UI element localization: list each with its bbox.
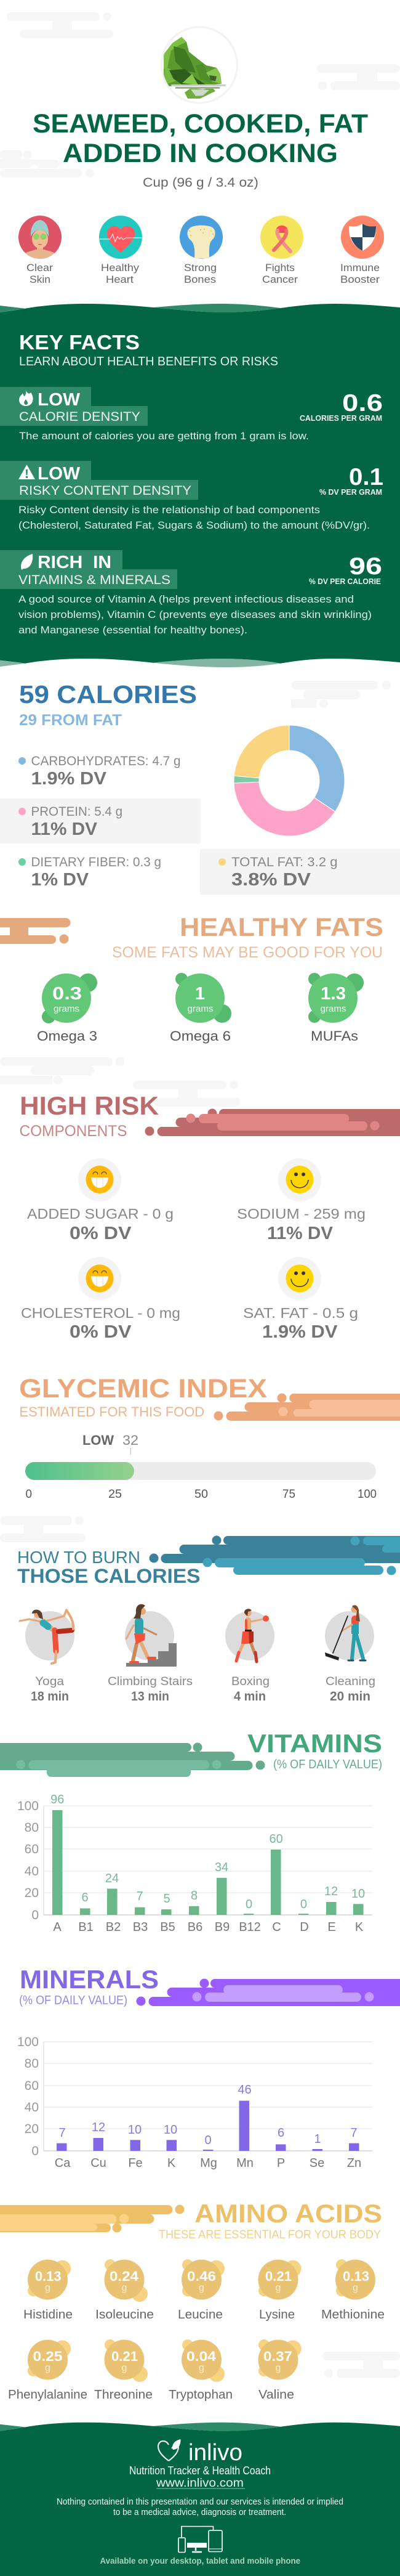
- macro: protein: [18, 805, 122, 839]
- amino acids heading: THESE ARE ESSENTIAL FOR YOUR BODY: [159, 2228, 381, 2241]
- fact: low risky content density: Risky Content density is the relationship of bad components: [18, 505, 320, 516]
- bar chart: vitamins: B5: [160, 1920, 175, 1934]
- amino: histidine: g: [45, 2283, 50, 2293]
- macro: total fat: [218, 855, 337, 890]
- bar chart: minerals: Zn: [347, 2156, 361, 2170]
- icon: leaf: [21, 554, 33, 570]
- MUFAs: 1.3: [321, 984, 346, 1004]
- component: added sugar: ADDED SUGAR - 0 g: [27, 1206, 174, 1222]
- amino acids heading: AMINO ACIDS: [194, 2199, 382, 2228]
- icon: yoga figure: [20, 1609, 73, 1664]
- gauge: glycemic index bar: [25, 1432, 377, 1501]
- amino: threonine: 0.21: [111, 2349, 138, 2364]
- bar chart: minerals: 7: [58, 2126, 66, 2140]
- exercise: boxing: 4 min: [234, 1689, 266, 1704]
- title: SEAWEED, COOKED, FAT: [33, 109, 368, 139]
- bar chart: vitamins: 0: [246, 1898, 252, 1911]
- bar chart: vitamins: 100: [17, 1799, 39, 1813]
- component: cholesterol: 0% DV: [70, 1322, 132, 1342]
- amino: phenylalanine: g: [45, 2363, 50, 2373]
- bar chart: minerals: 10: [128, 2123, 142, 2137]
- macro: carbohydrates: 1.9% DV: [31, 769, 107, 789]
- amino: tryptophan: g: [199, 2363, 204, 2373]
- icon: fights cancer ribbon: [260, 216, 303, 259]
- omega 3: grams: [54, 1004, 79, 1014]
- amino: isoleucine: Isoleucine: [95, 2308, 154, 2322]
- fact: low calorie density: [0, 387, 383, 442]
- fact: low calorie density: CALORIE DENSITY: [19, 410, 140, 424]
- amino: phenylalanine: 0.25: [33, 2349, 63, 2364]
- donut chart: macronutrients: [234, 725, 345, 836]
- bar chart: vitamins: 20: [25, 1886, 39, 1900]
- fact: rich in vitamins and minerals: vision problems), Vitamin C (prevents eye diseases and skin wrinkling): [18, 609, 372, 620]
- icon: devices: [178, 2526, 222, 2552]
- vitamins heading: [247, 1729, 382, 1771]
- exercise: climbing stairs: 13 min: [131, 1689, 169, 1704]
- gauge: glycemic index bar: LOW: [82, 1432, 114, 1448]
- logo: inlivo: inlivo: [188, 2440, 242, 2466]
- component: saturated fat: [243, 1257, 358, 1342]
- amino: tryptophan: 0.04: [186, 2349, 217, 2364]
- benefit labels: Skin: [30, 274, 50, 285]
- glycemic index heading: ESTIMATED FOR THIS FOOD: [20, 1404, 204, 1420]
- component: cholesterol: [21, 1257, 180, 1342]
- amino: threonine: g: [122, 2363, 127, 2373]
- bar chart: vitamins: 24: [105, 1872, 119, 1885]
- amino: threonine: [94, 2339, 153, 2402]
- icon: flame: [19, 390, 33, 406]
- benefit labels: [26, 262, 380, 285]
- component: saturated fat: 1.9% DV: [262, 1322, 338, 1342]
- bar chart: minerals: P: [277, 2156, 285, 2170]
- bar chart: minerals: 0: [204, 2134, 212, 2147]
- fact: rich in vitamins and minerals: VITAMINS & MINERALS: [18, 573, 170, 587]
- bar chart: vitamins: D: [300, 1920, 309, 1934]
- fact: low risky content density: [0, 461, 383, 531]
- bar chart: vitamins: K: [355, 1920, 364, 1934]
- disclaimer: to be a medical advice, diagnosis or treatment.: [113, 2507, 286, 2517]
- exercise: boxing: Boxing: [231, 1675, 270, 1688]
- bar chart: minerals: 80: [25, 2057, 39, 2071]
- serving size: Cup (96 g / 3.4 oz): [143, 176, 258, 190]
- bar chart: vitamins: B3: [133, 1920, 148, 1934]
- bar chart: minerals: 40: [25, 2100, 39, 2115]
- key facts heading: LEARN ABOUT HEALTH BENEFITS OR RISKS: [19, 355, 278, 368]
- bar chart: vitamins: 10: [351, 1887, 365, 1901]
- availability note: Available on your desktop, tablet and mobile phone: [100, 2556, 300, 2566]
- bar chart: vitamins: C: [272, 1920, 281, 1934]
- amino: isoleucine: 0.24: [110, 2269, 139, 2284]
- bar chart: minerals: Mg: [200, 2156, 217, 2170]
- footer tagline: [129, 2464, 271, 2490]
- fact: rich in vitamins and minerals: RICH IN: [38, 553, 111, 572]
- macro: dietary fiber: [18, 855, 161, 890]
- MUFAs: MUFAs: [311, 1028, 358, 1044]
- benefit labels: Healthy: [101, 262, 140, 274]
- bar chart: minerals: 7: [350, 2126, 358, 2140]
- component: sodium: SODIUM - 259 mg: [237, 1206, 366, 1222]
- bar chart: vitamins: 40: [25, 1864, 39, 1879]
- bar chart: minerals: Cu: [90, 2156, 106, 2170]
- fact: low risky content density: % DV PER GRAM: [319, 487, 382, 497]
- bar chart: vitamins: 6: [81, 1891, 89, 1904]
- component: added sugar: 0% DV: [70, 1224, 132, 1243]
- amino acids heading: [159, 2199, 382, 2241]
- panel: calories: [0, 680, 400, 895]
- macro: total fat: TOTAL FAT: 3.2 g: [231, 855, 337, 869]
- icon: immune booster shield: [341, 216, 384, 259]
- logo: inlivo: [158, 2439, 242, 2466]
- icon row: health benefits: [18, 216, 384, 285]
- bar chart: minerals: Se: [310, 2156, 324, 2170]
- bar chart: vitamins: 60: [269, 1832, 283, 1846]
- component: saturated fat: SAT. FAT - 0.5 g: [243, 1305, 358, 1321]
- fact: rich in vitamins and minerals: % DV PER CALORIE: [309, 577, 381, 586]
- omega 6: [170, 973, 231, 1044]
- food photo: seaweed in a glass bowl: [161, 27, 238, 103]
- icon: clear skin: [18, 216, 62, 259]
- calories heading: [19, 680, 197, 729]
- burn heading: [17, 1548, 201, 1587]
- bar chart: minerals: Fe: [128, 2156, 143, 2170]
- amino: lysine: 0.21: [265, 2269, 292, 2284]
- component: sodium: 11% DV: [267, 1224, 334, 1243]
- glycemic index heading: [19, 1374, 267, 1420]
- panel: amino acids: [0, 2199, 385, 2402]
- benefit labels: Heart: [106, 274, 134, 285]
- bar chart: minerals: 20: [25, 2122, 39, 2136]
- gauge: glycemic index bar: 50: [194, 1488, 208, 1501]
- amino: valine: g: [276, 2363, 281, 2373]
- fact: low risky content density: LOW: [38, 464, 81, 484]
- footer tagline: www.inlivo.com: [156, 2477, 244, 2490]
- amino: lysine: [258, 2260, 302, 2322]
- bar chart: vitamins: 96: [50, 1793, 64, 1806]
- amino: methionine: g: [353, 2283, 358, 2293]
- icon: grinning face: [86, 1264, 113, 1293]
- fact: low risky content density: RISKY CONTENT DENSITY: [19, 484, 191, 498]
- healthy fats heading: [112, 912, 383, 961]
- gauge: glycemic index bar: 100: [358, 1488, 377, 1501]
- bar chart: minerals: Mn: [236, 2156, 254, 2170]
- MUFAs: grams: [320, 1004, 346, 1014]
- vitamins heading: VITAMINS: [247, 1729, 382, 1758]
- benefit labels: Booster: [340, 274, 380, 285]
- macro: protein: 11% DV: [31, 819, 98, 839]
- bar chart: minerals: 6: [278, 2126, 284, 2140]
- bar chart: minerals: 1: [314, 2132, 321, 2146]
- fact: low calorie density: LOW: [38, 390, 81, 410]
- disclaimer: [57, 2497, 343, 2517]
- fact: low risky content density: (Cholesterol, Saturated Fat, Sugars & Sodium) to the amount (%DV/gr).: [18, 520, 370, 531]
- bar chart: minerals: 0: [31, 2144, 39, 2158]
- amino: methionine: 0.13: [343, 2269, 369, 2284]
- MUFAs: [308, 973, 364, 1044]
- fact: rich in vitamins and minerals: A good source of Vitamin A (helps prevent infectious diseases and: [18, 594, 354, 605]
- gauge: glycemic index bar: 32: [122, 1432, 138, 1448]
- benefit labels: Clear: [26, 262, 53, 274]
- bar chart: minerals: 10: [164, 2123, 177, 2137]
- bar chart: vitamins: A: [53, 1920, 62, 1934]
- icon: warning triangle: [18, 465, 35, 479]
- calories heading: 29 FROM FAT: [19, 712, 122, 729]
- amino: leucine: g: [199, 2283, 204, 2293]
- exercise: yoga: 18 min: [31, 1689, 69, 1704]
- glycemic index heading: GLYCEMIC INDEX: [19, 1374, 267, 1404]
- exercise: boxing: [225, 1609, 274, 1704]
- panel: minerals: [17, 1965, 400, 2170]
- benefit labels: Immune: [340, 262, 380, 274]
- footer tagline: Nutrition Tracker & Health Coach: [129, 2464, 271, 2477]
- exercise: cleaning: [325, 1605, 375, 1704]
- exercise: climbing stairs: [108, 1604, 193, 1704]
- amino: isoleucine: g: [122, 2283, 127, 2293]
- amino: phenylalanine: [8, 2340, 87, 2402]
- component: sodium: [237, 1158, 366, 1243]
- amino: isoleucine: [95, 2259, 154, 2322]
- amino: tryptophan: [169, 2339, 233, 2402]
- panel: how to burn those calories: [17, 1535, 400, 1704]
- amino: valine: [258, 2339, 302, 2402]
- omega 6: 1: [195, 984, 205, 1004]
- bar chart: minerals: 46: [238, 2083, 252, 2097]
- bar chart: vitamins: 80: [25, 1821, 39, 1835]
- gauge: glycemic index bar: 25: [108, 1488, 122, 1501]
- icon: grinning face: [86, 1166, 113, 1193]
- bar chart: vitamins: B1: [78, 1920, 94, 1934]
- bar chart: minerals: Ca: [55, 2156, 71, 2170]
- calories heading: 59 CALORIES: [19, 680, 197, 709]
- fact: low risky content density: 0.1: [349, 464, 383, 490]
- fact: rich in vitamins and minerals: and Manganese (essential for healthy bones).: [18, 625, 247, 636]
- amino: threonine: Threonine: [94, 2388, 153, 2402]
- benefit labels: Fights: [265, 262, 295, 274]
- high risk heading: [20, 1091, 159, 1140]
- bar chart: minerals: K: [167, 2156, 176, 2170]
- bar chart: vitamins: B6: [188, 1920, 202, 1934]
- high risk heading: COMPONENTS: [20, 1123, 127, 1140]
- exercise: yoga: [20, 1609, 74, 1704]
- icon: healthy heart: [99, 216, 142, 259]
- component: added sugar: [27, 1158, 174, 1243]
- exercise: climbing stairs: Climbing Stairs: [108, 1675, 193, 1688]
- minerals heading: MINERALS: [20, 1965, 159, 1994]
- macro: dietary fiber: 1% DV: [31, 870, 89, 890]
- panel: high risk components: [20, 1091, 400, 1342]
- benefit labels: Bones: [184, 274, 216, 285]
- amino: tryptophan: Tryptophan: [169, 2388, 233, 2402]
- bar chart: vitamins: [17, 1793, 372, 1934]
- minerals heading: [19, 1965, 159, 2007]
- macro: protein: PROTEIN: 5.4 g: [31, 805, 122, 819]
- amino: histidine: Histidine: [23, 2308, 73, 2322]
- benefit labels: Strong: [184, 262, 217, 274]
- bar chart: vitamins: 0: [31, 1908, 39, 1922]
- title: ADDED IN COOKING: [63, 139, 338, 168]
- bar chart: vitamins: B12: [239, 1920, 261, 1934]
- exercise: cleaning: Cleaning: [326, 1675, 375, 1688]
- key facts heading: KEY FACTS: [19, 331, 140, 354]
- bar chart: vitamins: 0: [300, 1898, 307, 1911]
- amino: lysine: g: [276, 2283, 281, 2293]
- omega 3: Omega 3: [37, 1028, 97, 1044]
- macro: dietary fiber: DIETARY FIBER: 0.3 g: [31, 855, 161, 869]
- key facts heading: [19, 331, 278, 368]
- amino: leucine: 0.46: [187, 2269, 216, 2284]
- amino: leucine: Leucine: [178, 2308, 223, 2322]
- icon: strong bones: [180, 216, 223, 259]
- burn heading: HOW TO BURN: [17, 1548, 140, 1567]
- bar chart: vitamins: B9: [215, 1920, 230, 1934]
- minerals heading: (% OF DAILY VALUE): [19, 1994, 127, 2007]
- high risk heading: HIGH RISK: [20, 1091, 159, 1120]
- fact: low calorie density: CALORIES PER GRAM: [300, 413, 382, 423]
- amino: valine: Valine: [258, 2388, 294, 2402]
- gauge: glycemic index bar: 75: [282, 1488, 295, 1501]
- bar chart: vitamins: 5: [163, 1892, 170, 1906]
- amino: valine: 0.37: [263, 2349, 292, 2364]
- panel: vitamins: [0, 1729, 382, 1934]
- title: [33, 109, 368, 168]
- panel: key facts: [0, 304, 400, 667]
- omega 3: 0.3: [52, 984, 82, 1004]
- bar chart: minerals: [17, 2035, 372, 2170]
- fact: low calorie density: 0.6: [342, 390, 383, 416]
- macro: total fat: 3.8% DV: [231, 870, 311, 890]
- panel: healthy fats: [0, 912, 383, 1044]
- exercise: yoga: Yoga: [35, 1675, 64, 1688]
- bar chart: vitamins: 12: [324, 1885, 338, 1898]
- bar chart: minerals: 12: [92, 2121, 105, 2134]
- icon: person sweeping: [325, 1605, 366, 1660]
- bar chart: vitamins: 7: [136, 1890, 143, 1903]
- amino: histidine: [23, 2260, 73, 2322]
- amino: phenylalanine: Phenylalanine: [8, 2388, 87, 2402]
- icon: boxer figure: [236, 1609, 269, 1662]
- benefit labels: Cancer: [262, 274, 298, 285]
- macro: carbohydrates: [18, 754, 181, 789]
- amino: leucine: [178, 2259, 225, 2322]
- omega 6: grams: [187, 1004, 213, 1014]
- healthy fats heading: SOME FATS MAY BE GOOD FOR YOU: [112, 944, 383, 961]
- fact: rich in vitamins and minerals: 96: [349, 553, 382, 580]
- bar chart: minerals: 100: [17, 2035, 39, 2049]
- bar chart: vitamins: 34: [215, 1861, 228, 1874]
- fact: rich in vitamins and minerals: [0, 550, 382, 636]
- amino: histidine: 0.13: [35, 2269, 62, 2284]
- fact: low calorie density: The amount of calories you are getting from 1 gram is low.: [19, 431, 309, 442]
- bar chart: vitamins: E: [327, 1920, 336, 1934]
- panel: footer: [0, 2423, 400, 2576]
- bar chart: vitamins: 8: [191, 1889, 198, 1903]
- icon: smiling face: [286, 1166, 314, 1193]
- component: cholesterol: CHOLESTEROL - 0 mg: [21, 1305, 180, 1321]
- icon: smiling face: [286, 1264, 314, 1293]
- amino: methionine: Methionine: [321, 2308, 385, 2322]
- gauge: glycemic index bar: 0: [26, 1488, 32, 1501]
- bar chart: minerals: 60: [25, 2079, 39, 2093]
- healthy fats heading: HEALTHY FATS: [180, 912, 383, 941]
- bar chart: vitamins: 60: [25, 1842, 39, 1856]
- icon: stair climbing figure: [126, 1604, 177, 1667]
- omega 3: [37, 973, 97, 1044]
- bar chart: vitamins: B2: [106, 1920, 121, 1934]
- panel: glycemic index: [19, 1374, 400, 1501]
- burn heading: THOSE CALORIES: [17, 1565, 201, 1587]
- omega 6: Omega 6: [170, 1028, 231, 1044]
- amino: methionine: [321, 2259, 385, 2322]
- amino: lysine: Lysine: [259, 2308, 295, 2322]
- exercise: cleaning: 20 min: [330, 1689, 370, 1704]
- disclaimer: Nothing contained in this presentation and our services is intended or implied: [57, 2497, 343, 2507]
- vitamins heading: (% OF DAILY VALUE): [273, 1758, 382, 1771]
- macro: carbohydrates: CARBOHYDRATES: 4.7 g: [31, 754, 181, 768]
